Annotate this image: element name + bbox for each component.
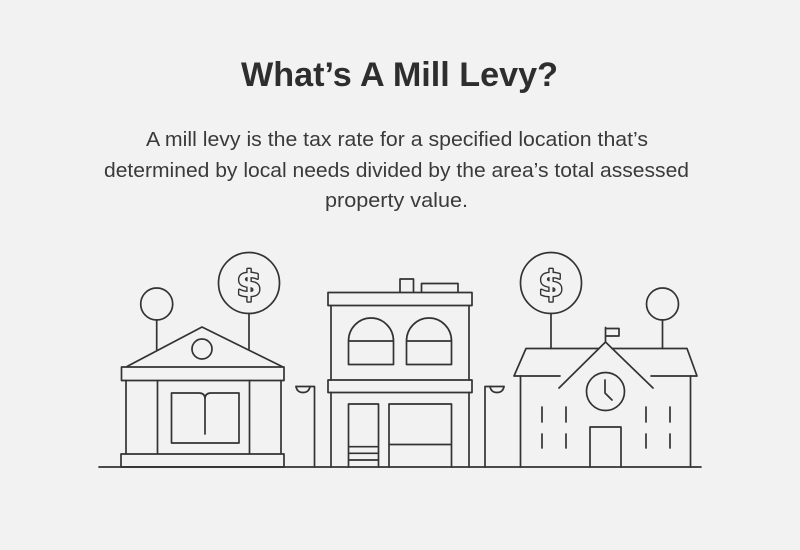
building: library (121, 252, 284, 467)
store display window (389, 404, 452, 467)
street lamp: left (296, 386, 314, 467)
school gable (559, 342, 653, 388)
icon: clock (586, 372, 624, 410)
store chimney and vent (400, 279, 458, 292)
description text: A mill levy is the tax rate for a specified location that’s (146, 129, 648, 151)
building: storefront (328, 279, 472, 467)
icon: plain circle on stem (646, 288, 678, 348)
store walls (331, 306, 469, 467)
library base (121, 454, 284, 467)
description text: property value. (325, 190, 468, 212)
library columns (126, 380, 281, 454)
street lamp: right (485, 386, 504, 467)
school windows (542, 407, 670, 448)
title: What’s A Mill Levy? (241, 56, 558, 94)
school door (590, 427, 621, 467)
description text: determined by local needs divided by the area’s total assessed (104, 160, 689, 182)
store arched window: right (406, 318, 452, 364)
store arched window: left (348, 318, 394, 364)
school roof (514, 348, 697, 376)
icon: flag (606, 328, 619, 342)
icon: plain circle on stem (141, 288, 173, 350)
icon: dollar coin on stem (218, 252, 280, 349)
library roof (127, 327, 282, 366)
ground line (99, 466, 701, 468)
store mid band (328, 380, 472, 392)
building: school (514, 252, 697, 467)
description text (104, 129, 689, 212)
school walls (520, 376, 690, 467)
icon: open book (172, 393, 239, 443)
icon: dollar coin on stem: $ (538, 264, 564, 305)
icon: dollar coin on stem: $ (236, 264, 262, 305)
store door with steps (348, 404, 378, 467)
icon: dollar coin on stem (520, 252, 582, 348)
store cornice (328, 292, 472, 306)
library entablature (122, 367, 284, 380)
